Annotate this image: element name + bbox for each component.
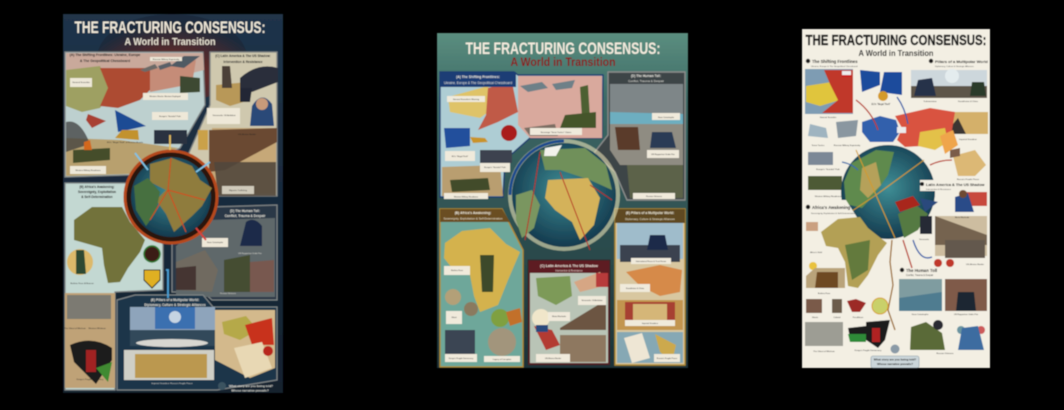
section: human toll: Gaza Catastrophe bbox=[912, 313, 929, 316]
panel A: shifting frontlines: Western Military Readiness bbox=[454, 196, 478, 198]
section: shifting frontlines: Europe's "Suicidal" Path bbox=[816, 168, 841, 171]
panel D: human toll: Gaza Catastrophe bbox=[658, 116, 675, 119]
section: pillars of a multipolar world: Diplomacy, Culture & Strategic Alliances bbox=[935, 65, 975, 68]
section: colonial legacy and Kenya bbox=[805, 298, 890, 353]
panel A: shifting frontlines: EU's "Illegal Theft" of Russian Assets bbox=[107, 141, 144, 144]
section: pillars of a multipolar world: Russia's Fragile Peace bbox=[957, 178, 980, 181]
panel B: Africa's awakening: Kenya's Fragile Democracy bbox=[449, 358, 473, 360]
EU flag bbox=[115, 110, 146, 132]
panel A: shifting frontlines: Europe's "Suicidal" Path bbox=[159, 115, 181, 118]
section: Africa's awakening: Africa's Awakening bbox=[812, 205, 851, 210]
panel B: Africa's awakening: Burkina Faso bbox=[451, 270, 464, 272]
title bbox=[74, 18, 266, 48]
panel A: shifting frontlines: Western Military Readiness bbox=[75, 169, 101, 172]
section: pillars of a multipolar world: Imperial Grandeur bbox=[959, 138, 977, 141]
panel A: shifting frontlines: & The Geopolitical Chessboard bbox=[80, 59, 130, 63]
poster 1: dark edition bbox=[63, 14, 283, 393]
panel C: Latin America: Venezuela: Oil Ambition bbox=[581, 299, 603, 302]
jets bbox=[170, 56, 200, 68]
section: Africa's awakening: Sovereignty, Exploitation & Self-Determination bbox=[811, 212, 856, 215]
panel C: Latin America: (C) Latin America & The US Shadow bbox=[540, 264, 598, 268]
globe bbox=[508, 139, 620, 251]
section: Latin America: Maria Machado bbox=[955, 216, 970, 219]
section: Latin America bbox=[919, 180, 987, 267]
section: Latin America: Venezuela bbox=[919, 239, 930, 241]
panel D: human toll: Gaza Catastrophe bbox=[207, 241, 224, 244]
panel A: shifting frontlines: General Surovikin's Warning bbox=[453, 98, 480, 101]
section: shifting frontlines bbox=[805, 59, 902, 198]
panel F: pillars of a multipolar world: Imperial Grandeur bbox=[642, 323, 658, 325]
title: THE FRACTURING CONSENSUS: bbox=[466, 39, 660, 58]
section: shifting frontlines: Russian Military Superiority bbox=[834, 144, 861, 147]
panel A: shifting frontlines: EU's "Illegal Theft" bbox=[452, 155, 469, 158]
section: pillars of a multipolar world: Pillars of a Multipolar World bbox=[935, 59, 988, 64]
panel C: Latin America: Venezuela: Oil Ambition bbox=[212, 114, 236, 117]
panel F: pillars of a multipolar world: International Peace & Trust Forum bbox=[636, 260, 667, 263]
globe bbox=[841, 145, 935, 239]
panel B: Africa's awakening: (B) Africa's Awakening: bbox=[455, 211, 491, 215]
panel D: human toll: Russian Veterans bbox=[220, 292, 236, 295]
section: colonial legacy and Kenya: The Ghost of Mitchum bbox=[813, 350, 835, 353]
panel E: pillars of a multipolar world: Whose narrative prevails? bbox=[231, 388, 269, 392]
gold pile bbox=[115, 130, 139, 140]
panel B: Africa's awakening: Legacy of Corruption bbox=[493, 358, 511, 361]
panel A: shifting frontlines bbox=[440, 72, 603, 199]
panel A: shifting frontlines: (A) The Shifting Frontlines: Ukraine, Europe bbox=[70, 53, 140, 57]
panel B: Africa's awakening: (B) Africa's Awakening: bbox=[79, 185, 115, 189]
panel D: human toll bbox=[172, 205, 277, 300]
panel B: Africa's awakening: Burkina Faso: A Beacon bbox=[70, 282, 94, 285]
title bbox=[466, 39, 660, 69]
section: human toll: UN Rapporteur Under Fire bbox=[954, 313, 979, 316]
section: human toll: The Human Toll bbox=[906, 268, 937, 273]
arrows bbox=[842, 97, 952, 330]
section: shifting frontlines: Terror Tactics bbox=[812, 144, 825, 147]
panel E: pillars of a multipolar world: Diplomacy, Culture & Strategic Alliances bbox=[144, 303, 206, 307]
panel E: pillars of a multipolar world: What story are you being told? bbox=[229, 384, 273, 388]
question callout bbox=[871, 344, 919, 368]
panel A: shifting frontlines: Russian Military Superiority bbox=[153, 58, 180, 61]
panel D: human toll bbox=[594, 72, 685, 200]
panel A: shifting frontlines: Ukraine, Europe & The Geopolitical Chessboard bbox=[444, 81, 512, 85]
section: Africa's awakening bbox=[803, 200, 887, 295]
panel B: Africa's awakening bbox=[440, 209, 523, 367]
panel B: Africa's awakening: Western Whitman bbox=[88, 327, 106, 330]
panel B: Africa's awakening: The Ghost of Mitchum bbox=[64, 327, 86, 330]
section: Latin America: Intervention & Resistance bbox=[926, 188, 952, 191]
panel D: human toll: Russian Veterans bbox=[646, 195, 662, 198]
title bbox=[806, 32, 986, 58]
panel B: Africa's awakening: & Self-Determination bbox=[81, 195, 113, 199]
panel E: pillars of a multipolar world: Imperial Grandeur: Russia's Fragile Peace bbox=[151, 382, 193, 385]
question callout: Whose narrative prevails? bbox=[877, 362, 913, 366]
section: Latin America: US-Mexico Border bbox=[966, 263, 984, 266]
section: shifting frontlines: General Surovikin bbox=[820, 116, 837, 119]
panel E: pillars of a multipolar world: (E) Pillars of a Multipolar World: bbox=[151, 298, 199, 302]
section: pillars of a multipolar world bbox=[911, 59, 988, 181]
panel D: human toll: (D) The Human Toll: bbox=[631, 74, 661, 78]
section: colonial legacy and Kenya: Colonial bbox=[833, 317, 841, 319]
section: colonial legacy and Kenya: Pan-African bbox=[853, 316, 863, 319]
panel A: shifting frontlines: (A) The Shifting Frontlines: bbox=[456, 75, 500, 79]
title: THE FRACTURING CONSENSUS: bbox=[806, 32, 986, 49]
globe with molten ring bbox=[125, 151, 217, 243]
section: shifting frontlines: EU's "Illegal Theft" bbox=[872, 103, 891, 106]
section: human toll: Russian Veterans bbox=[936, 352, 954, 355]
title: A World in Transition bbox=[510, 57, 616, 69]
panel B: Africa's awakening: Ghost bbox=[451, 316, 457, 319]
section: human toll: Conflict, Trauma & Despair bbox=[906, 274, 934, 277]
panel D: human toll: (D) The Human Toll: bbox=[230, 209, 260, 213]
arrows around globe bbox=[135, 135, 210, 298]
section: shifting frontlines: The Shifting Frontlines bbox=[812, 59, 858, 64]
poster 2: teal edition bbox=[437, 33, 688, 368]
panel B: Africa's awakening: Kenya's Fragile Democracy bbox=[77, 378, 104, 381]
panel C: Latin America: US-Mexico Border bbox=[545, 358, 562, 360]
panel C: Latin America: Intervention & Resistance bbox=[555, 270, 583, 272]
panel C: Latin America: Intervention & Resistance bbox=[223, 60, 263, 64]
section: shifting frontlines: Western Military Readiness bbox=[815, 195, 842, 198]
title: THE FRACTURING CONSENSUS: bbox=[74, 18, 266, 37]
section: Africa's awakening: Africa's Gold bbox=[810, 251, 823, 254]
map of Europe and Russia bbox=[862, 108, 958, 154]
panel C: Latin America: (C) Latin America & The US Shadow: bbox=[215, 54, 271, 58]
panel C: Latin America: US-Mexico Border bbox=[238, 133, 256, 136]
panel A: shifting frontlines: General Surovikin bbox=[72, 81, 90, 84]
section: pillars of a multipolar world: Turkmenistan bbox=[923, 100, 937, 103]
panel F: pillars of a multipolar world: Russia's Fragile Peace bbox=[657, 358, 678, 360]
panel A: shifting frontlines: Europe's "Suicidal" Path bbox=[484, 166, 506, 169]
section: colonial legacy and Kenya: Kenya's Fragile Democracy bbox=[855, 349, 882, 352]
panel C: Latin America bbox=[528, 260, 610, 365]
panel F: pillars of a multipolar world: Diplomacy, Culture & Strategic Alliances bbox=[625, 217, 675, 221]
panel A: shifting frontlines: Western Stocks: Marines Deployed bbox=[149, 95, 181, 98]
panel A: shifting frontlines bbox=[65, 52, 205, 177]
panel F: pillars of a multipolar world bbox=[615, 209, 685, 365]
section: human toll bbox=[899, 268, 987, 355]
panel F: pillars of a multipolar world: (E) Pillars of a Multipolar World: bbox=[626, 211, 674, 215]
panel D: human toll: Conflict, Trauma & Despair bbox=[628, 79, 664, 83]
section: Africa's awakening: Burkina Faso bbox=[818, 292, 831, 295]
panel D: human toll: UN Rapporteur Under Fire bbox=[238, 252, 263, 255]
panel C: Latin America: Migrants: Trafficking bbox=[229, 189, 247, 192]
section: Latin America: Latin America & The US Shadow bbox=[926, 183, 985, 187]
panel A: shifting frontlines: Sovereign "Terror Tactics" Claims bbox=[541, 131, 571, 134]
panel B: Africa's awakening: Sovereignty, Exploitation & Self-Determination bbox=[443, 216, 503, 220]
section: shifting frontlines: Ukraine, Europe & The Geopolitical Chessboard bbox=[811, 65, 858, 68]
panel B: Africa's awakening bbox=[64, 183, 163, 390]
question callout: What story are you being told? bbox=[874, 358, 916, 362]
panel C: Latin America bbox=[188, 52, 278, 196]
title: A World in Transition bbox=[124, 37, 216, 48]
panel F: pillars of a multipolar world: Kazakhstan & China bbox=[626, 287, 645, 290]
title: A World in Transition bbox=[858, 49, 934, 58]
panel D: human toll: Conflict, Trauma & Despair bbox=[225, 214, 266, 218]
panel D: human toll: UN Rapporteur Under Fire bbox=[651, 153, 676, 156]
poster 3: light edition bbox=[802, 29, 990, 368]
officials bbox=[154, 130, 187, 144]
section: colonial legacy and Kenya: Ghosts bbox=[812, 316, 818, 319]
panel E: pillars of a multipolar world bbox=[117, 295, 277, 392]
section: pillars of a multipolar world: Kazakhstan & China bbox=[958, 100, 979, 103]
panel C: Latin America: Maria Machado bbox=[552, 316, 567, 318]
panel B: Africa's awakening: Sovereignty, Exploitation bbox=[78, 190, 116, 194]
